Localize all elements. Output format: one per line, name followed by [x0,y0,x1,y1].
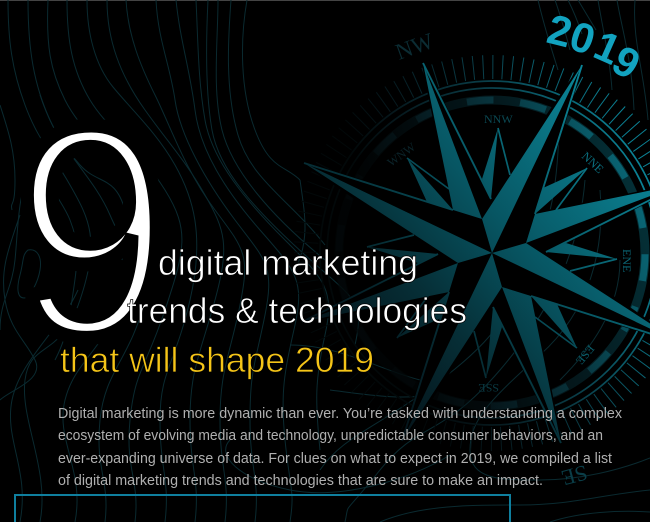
compass direction labels: SE [559,460,590,491]
compass direction labels: NNW [484,112,513,126]
year badge 2019: 2 [543,5,577,56]
compass rose [302,28,650,491]
compass direction labels: ESE [573,342,597,367]
headline line 3: that will shape 2019 [60,341,374,380]
main blades [302,63,650,443]
year badge 2019: 0 [564,12,601,64]
content box outline [15,495,510,522]
compass second ring [327,88,650,418]
compass direction labels: NNE [579,149,607,176]
minor blade thin edges [367,128,617,378]
big numeral 9: 9 [14,65,169,399]
minor blades [367,128,617,378]
headline line 2: trends & technologies [127,290,467,331]
intro paragraph [58,405,622,489]
compass tick marks [306,67,650,439]
year badge 2019 [543,5,648,88]
intro paragraph: ecosystem of evolving media and technology, unpredictable consumer behaviors, and an [58,427,603,444]
headline line 1: digital marketing [158,242,418,283]
compass direction labels: SSE [478,381,499,395]
intro paragraph: ever-expanding universe of data. For clues on what to expect in 2019, we compiled a list [58,450,613,467]
compass direction labels: NW [392,28,437,65]
compass direction labels: ENE [620,249,634,272]
intro paragraph: Digital marketing is more dynamic than ever. You’re tasked with understanding a complex [58,405,622,422]
compass outer ring [320,81,650,425]
year badge 2019: 9 [604,36,648,88]
compass direction labels [385,28,634,491]
headline [60,242,467,380]
compass band segments [339,100,645,406]
intro paragraph: of digital marketing trends and technologies that are sure to make an impact. [58,472,543,489]
year badge 2019: 1 [587,21,628,74]
top edge line [0,0,650,1]
black star backing [302,63,650,443]
compass dark band [339,100,645,406]
blade thin edges [302,63,650,443]
compass direction labels: WNW [385,139,419,169]
